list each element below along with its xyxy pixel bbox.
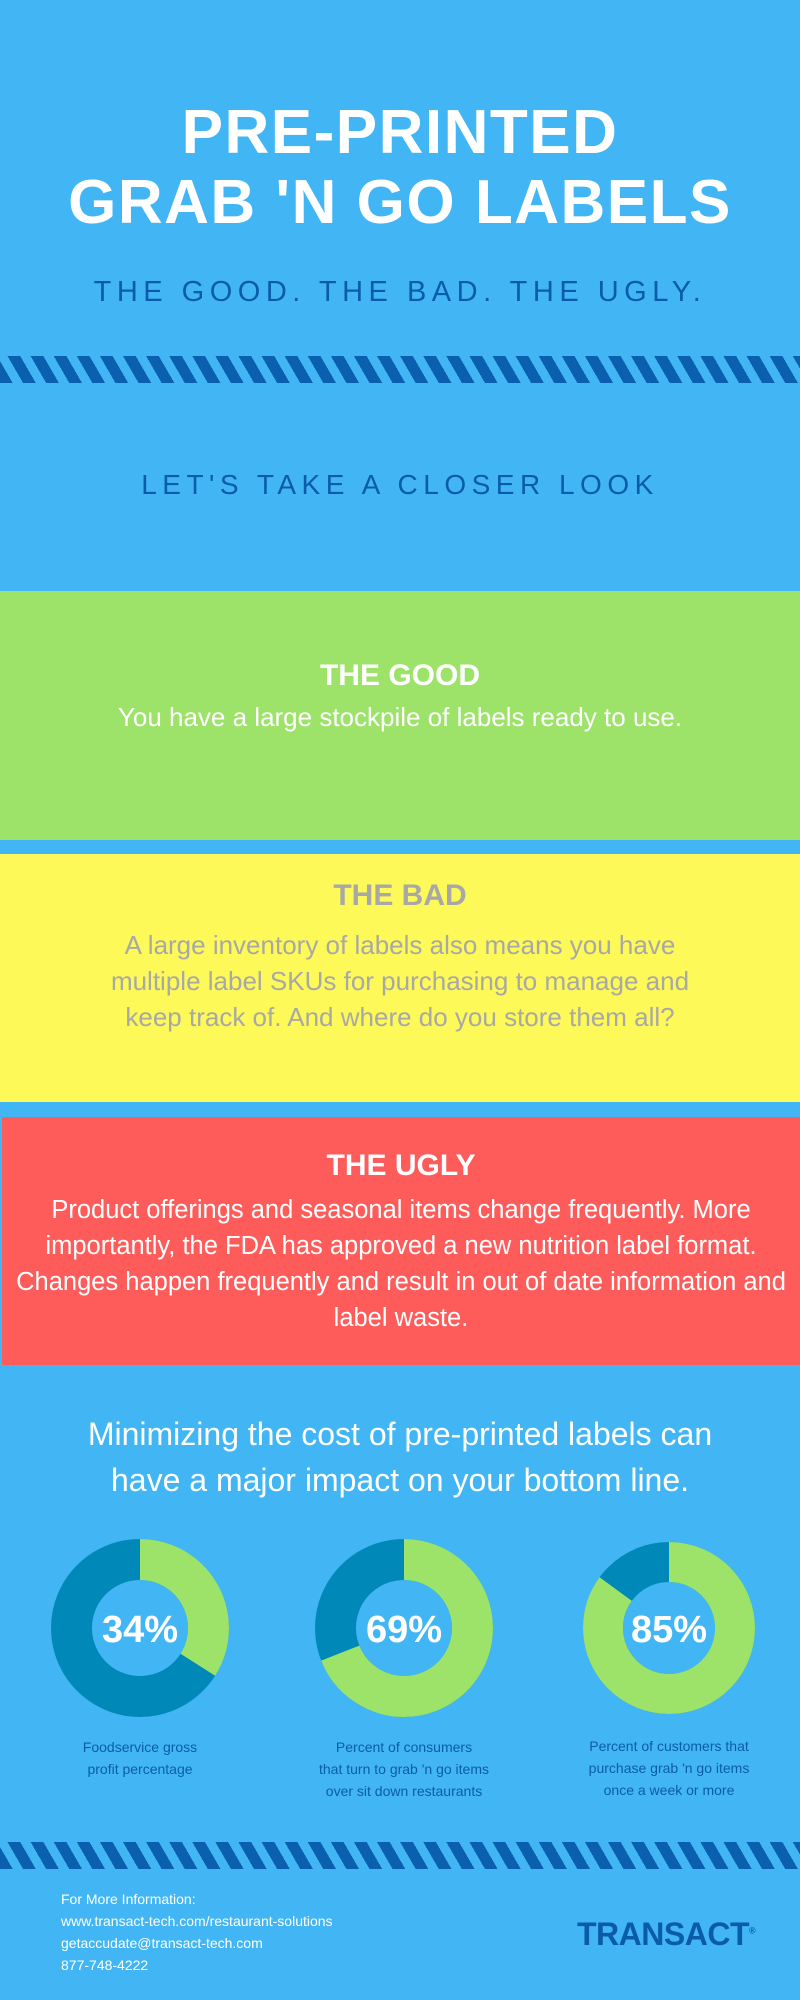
label: 85% xyxy=(589,1738,749,1798)
text: the good: You have a large stockpile of labels ready to use. xyxy=(118,702,682,732)
title: GRAB 'N GO LABELS xyxy=(68,168,732,237)
logo: transact: TRANSACT® xyxy=(577,1916,755,1952)
text: the bad xyxy=(111,930,689,1032)
donut: 85% xyxy=(603,1562,735,1694)
intro text xyxy=(88,1416,712,1498)
label: 34%: Foodservice gross xyxy=(83,1739,197,1755)
heading: the ugly: THE UGLY xyxy=(327,1149,475,1182)
label: 85%: once a week or more xyxy=(604,1782,734,1798)
text: the bad: keep track of. And where do you store them all? xyxy=(125,1002,675,1032)
panel: the bad xyxy=(0,854,800,1102)
heading: the bad: THE BAD xyxy=(333,879,467,912)
subtitle: THE GOOD. THE BAD. THE UGLY. xyxy=(94,276,706,308)
text: the ugly: importantly, the FDA has approved a new nutrition label format. xyxy=(45,1232,757,1260)
donut charts xyxy=(51,1539,755,1717)
label: 69%: Percent of consumers xyxy=(336,1739,472,1755)
label: 69%: that turn to grab 'n go items xyxy=(319,1761,489,1777)
label: 85%: Percent of customers that xyxy=(589,1738,749,1754)
footer contact: www.transact-tech.com/restaurant-solutions xyxy=(61,1913,333,1929)
donut: 85%: 85% xyxy=(631,1609,707,1651)
heading: the good: THE GOOD xyxy=(320,659,480,692)
section heading: LET'S TAKE A CLOSER LOOK xyxy=(141,469,659,500)
label: 85%: purchase grab 'n go items xyxy=(589,1760,749,1776)
text: the ugly: label waste. xyxy=(334,1304,468,1332)
label: 34% xyxy=(83,1739,197,1777)
donut: 34%: 34% xyxy=(102,1609,178,1651)
footer contact xyxy=(61,1891,333,1973)
title xyxy=(68,98,732,237)
text: the bad: A large inventory of labels also means you have xyxy=(125,930,675,960)
text: the ugly: Changes happen frequently and result in out of date information and xyxy=(16,1268,786,1296)
label: 34%: profit percentage xyxy=(87,1761,193,1777)
intro text: have a major impact on your bottom line. xyxy=(111,1462,689,1498)
title: PRE-PRINTED xyxy=(182,98,618,167)
donut: 69% xyxy=(336,1560,472,1696)
intro text: Minimizing the cost of pre-printed labels can xyxy=(88,1416,712,1452)
text: the ugly xyxy=(16,1196,786,1332)
text: the ugly: Product offerings and seasonal items change frequently. More xyxy=(51,1196,751,1224)
label: 69%: over sit down restaurants xyxy=(326,1783,482,1799)
donut: 69%: 69% xyxy=(366,1609,442,1651)
label: 69% xyxy=(319,1739,489,1799)
panel: the ugly xyxy=(2,1117,800,1365)
footer contact: getaccudate@transact-tech.com xyxy=(61,1935,263,1951)
footer contact: 877-748-4222 xyxy=(61,1957,148,1973)
footer contact: For More Information: xyxy=(61,1891,196,1907)
text: the bad: multiple label SKUs for purchasing to manage and xyxy=(111,966,689,996)
donut: 34% xyxy=(72,1560,208,1696)
panel: the good xyxy=(0,591,800,840)
